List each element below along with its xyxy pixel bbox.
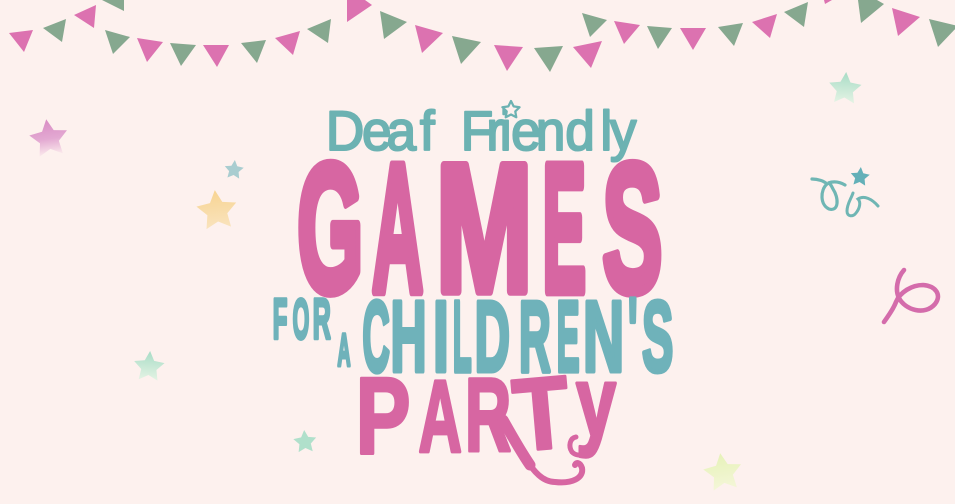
star: gold [195, 188, 239, 230]
title: PARTY [356, 346, 616, 482]
title: GAMES: S [602, 127, 662, 330]
title: CHILDREN'S [362, 280, 673, 393]
title: FOR A [273, 288, 350, 376]
star: green top right [828, 71, 862, 104]
star: green bottom [293, 429, 317, 452]
title: GAMES [297, 126, 662, 331]
star: small blue-grey [224, 159, 244, 179]
squiggle: teal right [847, 193, 878, 216]
title: CHILDREN'S: C [362, 282, 390, 393]
title: GAMES: G [297, 127, 363, 331]
star: lime bottom right [701, 451, 744, 492]
star: green left [133, 350, 165, 381]
title: GAMES: E [542, 126, 586, 330]
title: FOR A: F [273, 289, 287, 352]
title: PARTY: A [418, 359, 462, 473]
title: CHILDREN'S: N [583, 281, 624, 393]
title: CHILDREN'S: S [642, 280, 673, 393]
title: CHILDREN'S: E [557, 280, 580, 392]
bunting: centre garland [347, 0, 602, 72]
title: FOR A: O [293, 288, 309, 352]
title: Deaf Friendly: Deaf [326, 100, 435, 162]
title: CHILDREN'S: D [475, 281, 510, 393]
title: FOR A: R [313, 288, 331, 351]
title: GAMES: M [436, 128, 533, 330]
title: Deaf Friendly: Friendly [461, 100, 637, 162]
title: CHILDREN'S: L [453, 280, 472, 393]
squiggle: teal left [812, 179, 845, 209]
icon: star over the i [502, 101, 520, 117]
title: PARTY: y [576, 346, 616, 458]
title: CHILDREN'S: I [433, 281, 449, 393]
title: PARTY: R [465, 358, 511, 473]
title: Deaf Friendly [326, 100, 637, 162]
title: PARTY: P [356, 356, 410, 477]
swash: R leg and tail [503, 420, 592, 482]
title: GAMES: A [372, 128, 423, 331]
title: PARTY: T [509, 356, 574, 473]
title: CHILDREN'S: ' [628, 280, 638, 380]
bunting: right garland [582, 0, 955, 50]
title: FOR A: A [338, 326, 350, 376]
star: teal by squiggles [850, 166, 870, 186]
title: CHILDREN'S: H [390, 280, 427, 393]
bunting: left garland [9, 0, 331, 67]
squiggle: pink [884, 270, 938, 322]
star: pink faded [27, 117, 70, 158]
title: CHILDREN'S: R [519, 282, 551, 393]
